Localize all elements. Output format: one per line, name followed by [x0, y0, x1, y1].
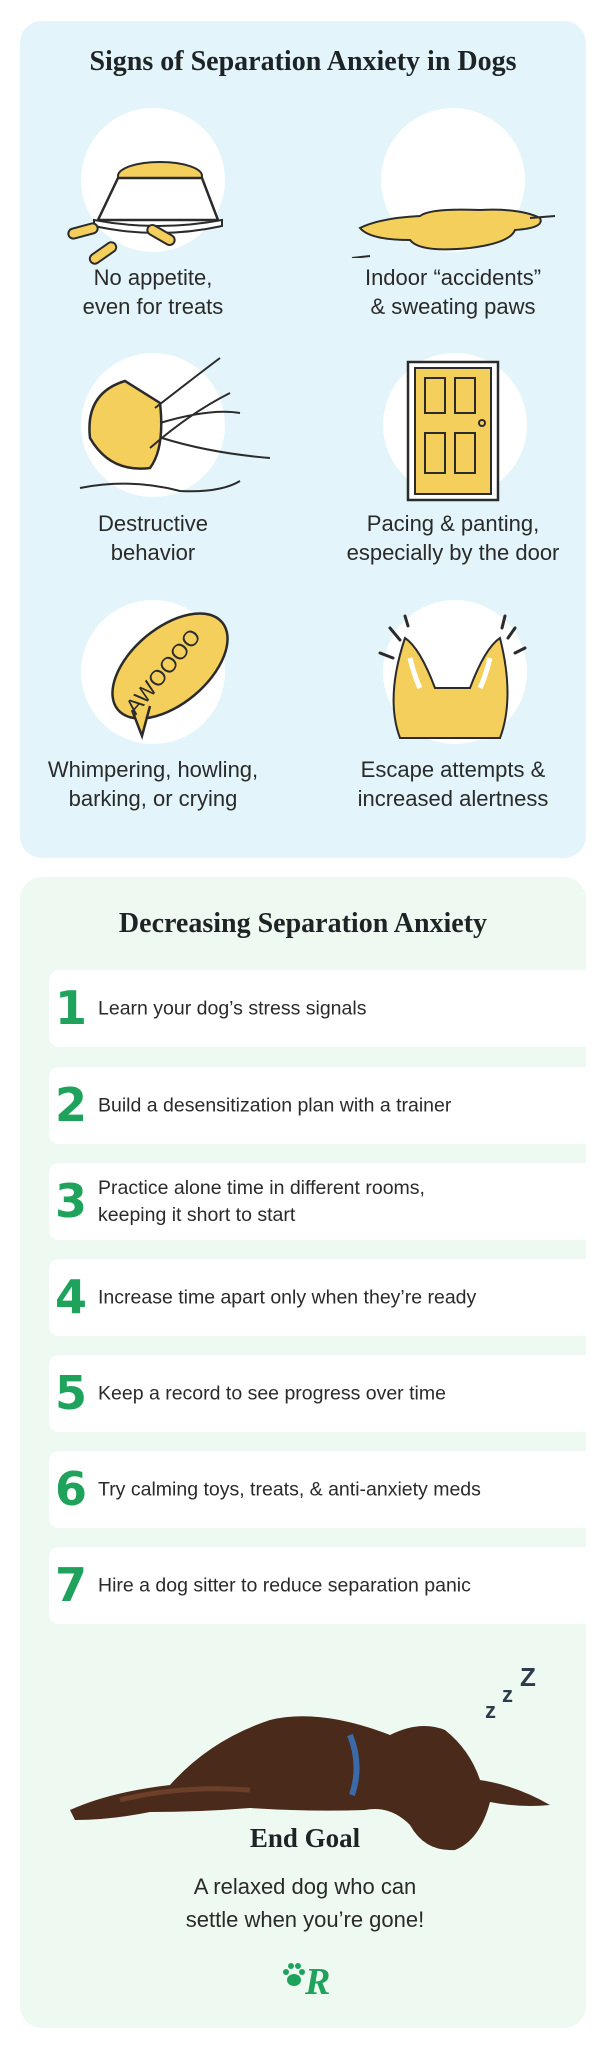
label: pacing: Pacing & panting,	[367, 511, 539, 536]
icon: bowl	[67, 108, 225, 265]
icon: speech bubble	[81, 600, 229, 744]
label: accidents	[365, 265, 541, 319]
heading: end goal: End Goal	[250, 1823, 360, 1853]
step 4: Increase time apart only when they’re ready	[98, 1286, 476, 1308]
step 5: 5	[55, 1365, 87, 1419]
zzz text: Z	[520, 1662, 536, 1692]
label: pacing: especially by the door	[347, 540, 559, 565]
zzz text: z	[502, 1682, 513, 1707]
label: whimpering: Whimpering, howling,	[48, 757, 258, 782]
text: end goal	[186, 1874, 424, 1932]
label: destructive	[98, 511, 208, 565]
step 4: 4	[55, 1269, 87, 1323]
label: no appetite: even for treats	[83, 294, 223, 319]
label: escape: increased alertness	[358, 786, 548, 811]
label: accidents: Indoor “accidents”	[365, 265, 541, 290]
step 3: 3	[55, 1173, 87, 1227]
icon: puddle	[352, 108, 556, 258]
label: escape: Escape attempts &	[361, 757, 545, 782]
title: signs: Signs of Separation Anxiety in Dogs	[89, 46, 517, 77]
label: pacing	[347, 511, 559, 565]
illustration: sleeping dog	[70, 1716, 550, 1850]
icon: plant pot	[80, 353, 270, 497]
label: no appetite	[83, 265, 223, 319]
label: accidents: & sweating paws	[370, 294, 536, 319]
step 5: Keep a record to see progress over time	[98, 1382, 446, 1404]
step 6: 6	[55, 1461, 87, 1515]
label: destructive: behavior	[111, 540, 195, 565]
panel: decreasing	[20, 877, 586, 2028]
step 6	[49, 1451, 586, 1528]
label: whimpering: barking, or crying	[69, 786, 237, 811]
step 4	[49, 1259, 586, 1336]
text: end goal: settle when you’re gone!	[186, 1907, 424, 1932]
zzz text	[485, 1662, 536, 1723]
icon: speech bubble: AWOOOO	[120, 624, 206, 719]
step 3: Practice alone time in different rooms,	[98, 1176, 425, 1198]
step 1	[49, 970, 586, 1047]
step 7: Hire a dog sitter to reduce separation panic	[98, 1574, 471, 1596]
title: decreasing: Decreasing Separation Anxiety	[119, 908, 487, 939]
step 3: keeping it short to start	[98, 1204, 295, 1226]
step 1: 1	[55, 980, 87, 1034]
step 5	[49, 1355, 586, 1432]
step 7	[49, 1547, 586, 1624]
step 2: 2	[55, 1077, 87, 1131]
step 2	[49, 1067, 586, 1144]
label: destructive: Destructive	[98, 511, 208, 536]
icon: door	[383, 353, 527, 502]
step 1: Learn your dog’s stress signals	[98, 997, 366, 1019]
panel: signs	[20, 21, 586, 858]
label: whimpering	[48, 757, 258, 811]
label: no appetite: No appetite,	[94, 265, 212, 290]
text: end goal: A relaxed dog who can	[194, 1874, 416, 1899]
zzz text: z	[485, 1698, 496, 1723]
step 2: Build a desensitization plan with a trainer	[98, 1094, 451, 1116]
logo	[283, 1961, 330, 2000]
step 6: Try calming toys, treats, & anti-anxiety meds	[98, 1478, 481, 1500]
step 3	[49, 1163, 586, 1240]
step 7: 7	[55, 1557, 87, 1611]
icon: dog ears	[378, 600, 527, 744]
label: escape	[358, 757, 548, 811]
